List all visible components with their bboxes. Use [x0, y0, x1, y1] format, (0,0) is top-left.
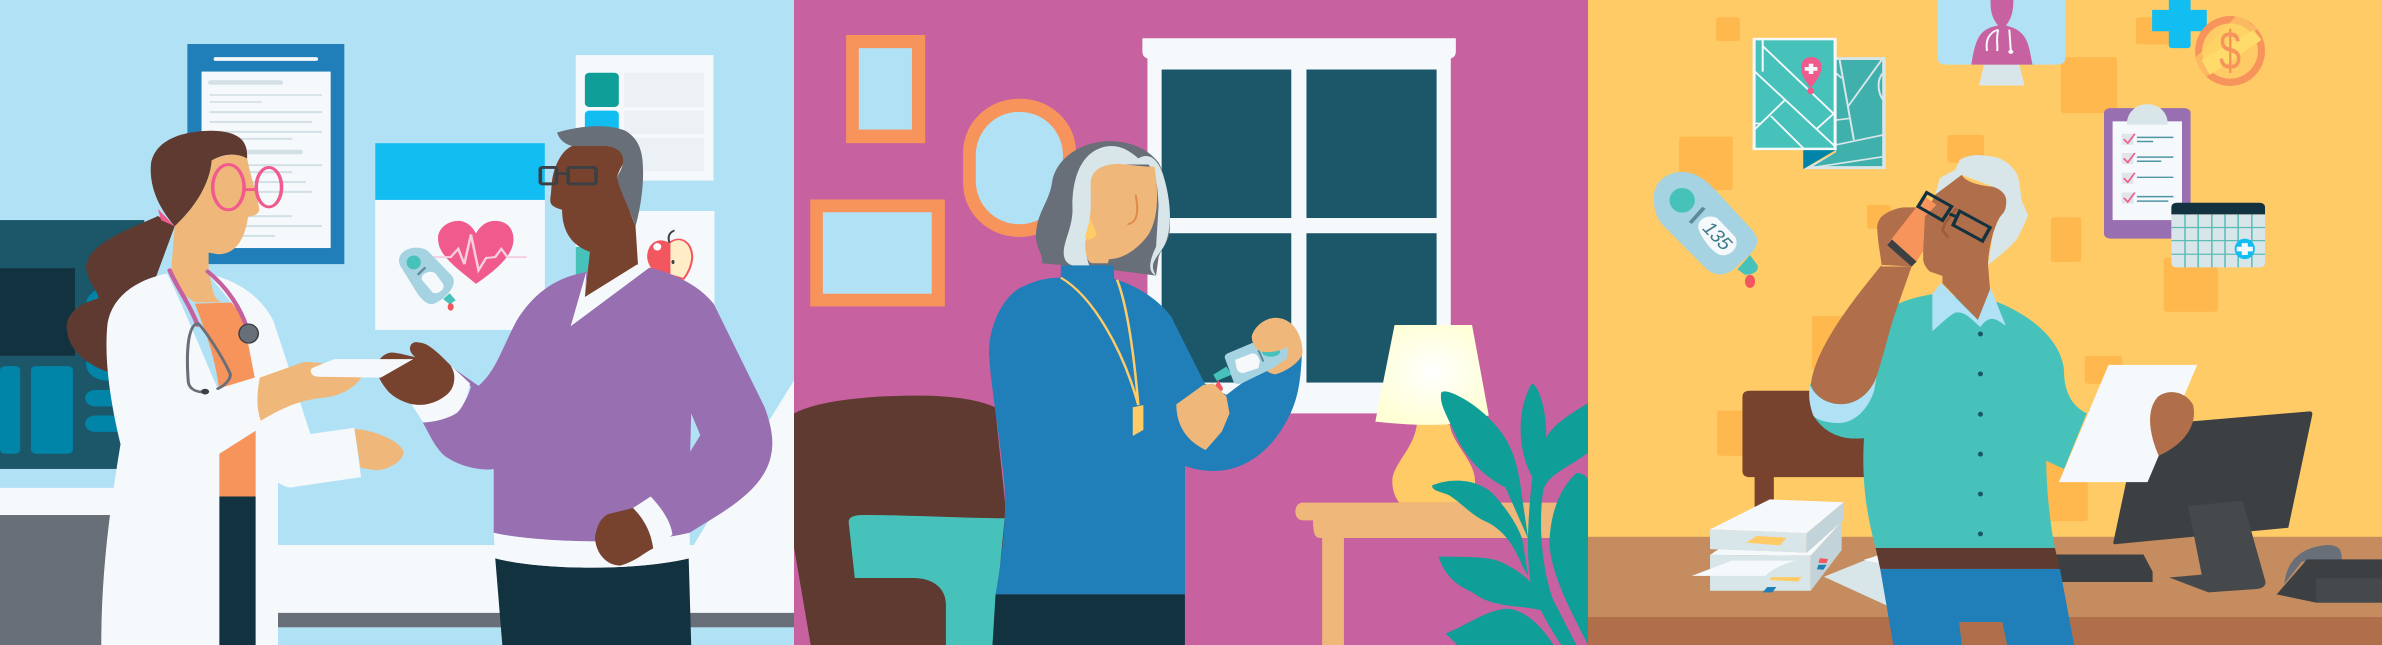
medical machine [0, 220, 144, 469]
icon: map [1753, 38, 1886, 169]
face and neck [171, 155, 259, 302]
other hand [354, 429, 404, 470]
sweater hem [494, 533, 690, 568]
hand with finger [1176, 383, 1229, 450]
exam bed [278, 380, 794, 627]
heart health poster [375, 143, 545, 330]
left cuff [412, 367, 470, 422]
picture frame small [846, 35, 925, 143]
grey hair [557, 126, 643, 226]
purple sweater [423, 267, 772, 541]
hand in pocket [595, 508, 653, 566]
table lamp [1375, 325, 1489, 503]
panel: clinic consultation [0, 0, 794, 645]
glucose meter [1213, 342, 1288, 392]
trousers [993, 594, 1185, 645]
desk chair [1742, 391, 1872, 510]
icon: telehealth doctor monitor [1937, 0, 2066, 86]
oval mirror [963, 99, 1076, 237]
hair highlight [1064, 146, 1170, 276]
forearm and hand holding card [257, 362, 362, 421]
patient [311, 126, 772, 645]
icon: heart [438, 221, 513, 284]
hand taking card [379, 342, 454, 405]
glasses [213, 165, 282, 210]
icon: calendar [2171, 203, 2265, 267]
blue sweater [989, 265, 1302, 594]
nutrition chart poster [576, 55, 713, 181]
jeans [1880, 569, 2074, 645]
icon: ecg line [430, 234, 527, 270]
icon: large glucose meter: 135 [1697, 219, 1738, 254]
hair [1935, 155, 2028, 265]
shirt collar [1932, 283, 2006, 331]
trousers [495, 558, 691, 645]
icon: dollar coin [2192, 14, 2265, 86]
icon: checklist clipboard [2104, 104, 2191, 239]
side table [1295, 503, 1588, 645]
card [311, 359, 413, 378]
doctor [67, 131, 404, 645]
glasses [540, 167, 596, 184]
window [1142, 38, 1456, 413]
glasses [1918, 193, 1990, 241]
orange shirt [195, 302, 256, 391]
thumb over meter [1252, 318, 1302, 354]
necklace [1061, 278, 1143, 436]
icon: dollar coin: $ [2219, 21, 2241, 82]
belt [1876, 548, 2060, 569]
computer monitor [2113, 411, 2312, 592]
counter [0, 488, 132, 645]
head and neck [550, 146, 638, 297]
armchair [794, 396, 1007, 645]
icon: large glucose meter [1654, 172, 1758, 288]
icon: glucose meter [399, 248, 456, 311]
right cuff [633, 496, 672, 548]
paper held [2059, 365, 2197, 482]
raised arm and hand [1811, 207, 1923, 404]
icon: map pin [1801, 57, 1821, 94]
panel: man managing care at desk [1588, 0, 2382, 645]
head and neck [1923, 175, 2006, 320]
stethoscope [170, 270, 258, 394]
teal shirt [1810, 294, 2087, 548]
icon: medical plus [2152, 0, 2207, 48]
collar [571, 264, 650, 326]
face [1085, 164, 1157, 263]
woman [989, 141, 1302, 645]
hair back [1036, 141, 1170, 276]
panel: woman testing at home [794, 0, 1588, 645]
houseplant [1432, 383, 1588, 645]
loose paper [1824, 554, 1887, 606]
white coat [101, 274, 361, 645]
shirt buttons [1978, 332, 1983, 536]
man on phone [1809, 155, 2197, 645]
icon: apple [647, 230, 692, 279]
hand behind meter [1252, 318, 1302, 374]
background tiles [1679, 17, 2218, 521]
paper stacks [1692, 499, 1844, 592]
desk phone [2277, 545, 2382, 603]
desk [1588, 537, 2382, 645]
hand holding paper [2150, 392, 2194, 456]
keyboard [2056, 554, 2153, 582]
mobile phone [1887, 197, 1936, 267]
picture frame large [810, 200, 945, 306]
hair top [151, 131, 247, 226]
sleeve cuff [1809, 376, 1877, 423]
hair ponytail [67, 216, 175, 372]
wall clipboard poster [187, 44, 344, 264]
apple poster [576, 211, 715, 376]
